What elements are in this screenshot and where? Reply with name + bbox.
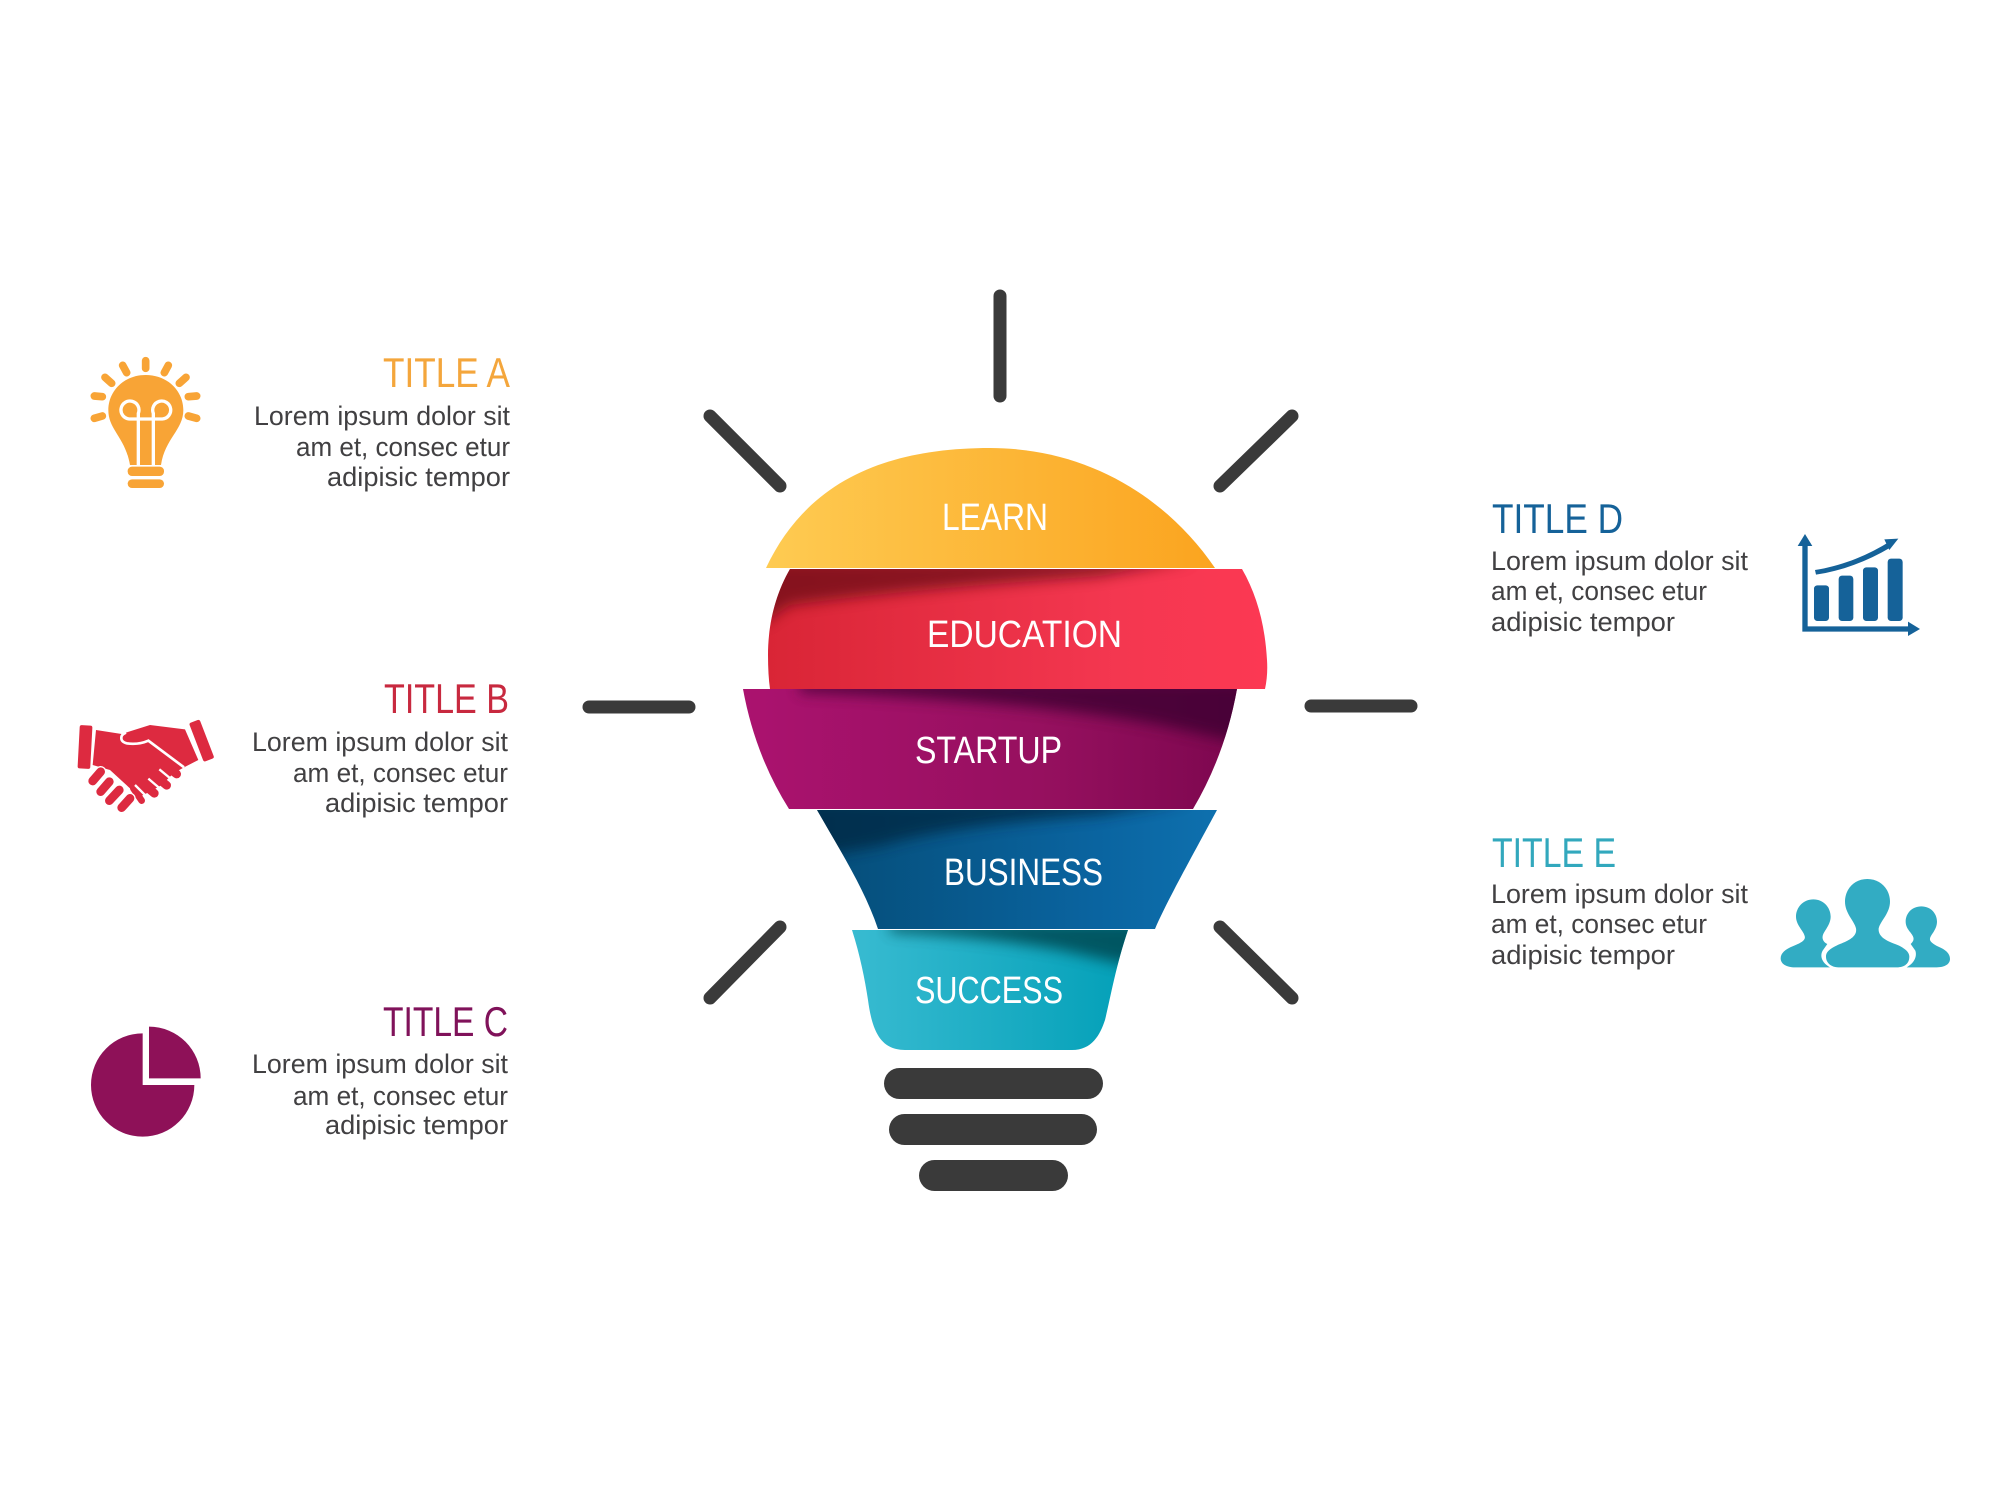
heading: TITLE D (1492, 495, 1623, 542)
light rays (589, 296, 1411, 998)
text block: Lorem ipsum dolor sit (1491, 879, 1748, 909)
panel: title C (91, 998, 508, 1140)
heading: TITLE B (384, 675, 509, 722)
segment: success: SUCCESS (915, 970, 1063, 1012)
text block: am et, consec etur (293, 758, 508, 788)
central light bulb (743, 448, 1267, 1191)
heading: TITLE E (1492, 829, 1616, 876)
icon: people (1781, 879, 1950, 967)
text block: am et, consec etur (1491, 909, 1707, 939)
bulb base (884, 1068, 1103, 1191)
text block: Lorem ipsum dolor sit (1491, 546, 1748, 576)
text block (252, 1049, 508, 1140)
segment: startup: STARTUP (915, 730, 1062, 772)
heading: TITLE C (383, 998, 508, 1045)
panel: title B (78, 675, 509, 818)
segment: education: EDUCATION (927, 614, 1122, 656)
text block: am et, consec etur (296, 432, 510, 462)
panel: title E (1491, 829, 1950, 970)
segment: business: BUSINESS (944, 852, 1103, 894)
text block: am et, consec etur (293, 1081, 508, 1111)
icon: handshake (78, 719, 214, 808)
segment: learn (766, 448, 1215, 568)
panel: title A (94, 349, 510, 492)
text block (254, 401, 510, 492)
text block: adipisic tempor (327, 462, 510, 492)
panel: title D (1491, 495, 1920, 637)
text block (252, 727, 508, 818)
segment: education (760, 560, 1267, 689)
text block: adipisic tempor (1491, 940, 1675, 970)
segment: success (852, 930, 1128, 1050)
text block (1491, 879, 1748, 970)
text block (1491, 546, 1748, 637)
heading: TITLE A (383, 349, 510, 396)
icon: bar chart (1798, 534, 1920, 636)
segment: learn: LEARN (942, 497, 1048, 539)
text block: adipisic tempor (325, 1110, 508, 1140)
icon: pie chart (91, 1027, 201, 1137)
text block: Lorem ipsum dolor sit (254, 401, 510, 431)
text block: adipisic tempor (1491, 607, 1675, 637)
icon: light bulb (94, 361, 197, 488)
text block: am et, consec etur (1491, 576, 1707, 606)
segment: business (817, 810, 1217, 929)
text block: Lorem ipsum dolor sit (252, 1049, 508, 1079)
text block: adipisic tempor (325, 788, 508, 818)
segment: startup (743, 680, 1250, 809)
text block: Lorem ipsum dolor sit (252, 727, 508, 757)
